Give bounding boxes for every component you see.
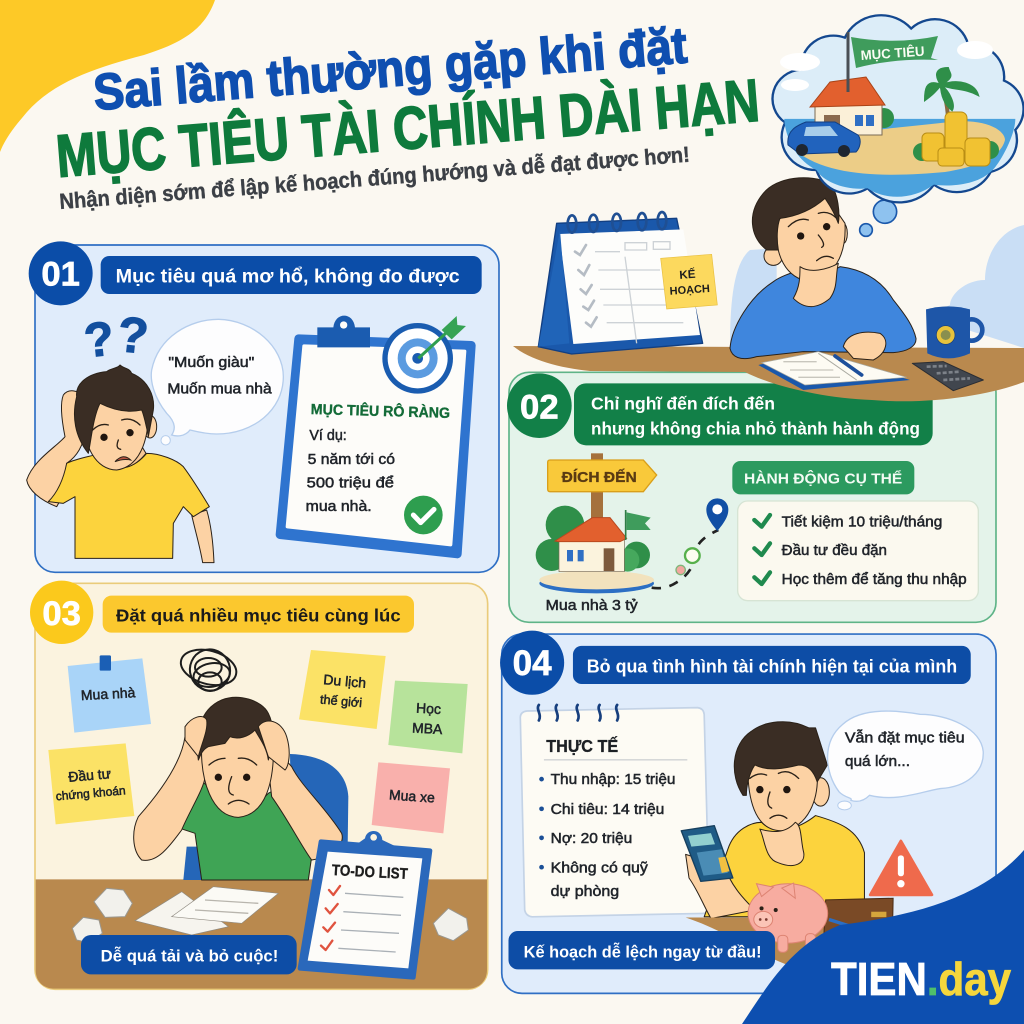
clipboard clear goal: 500 triệu để [307, 475, 394, 491]
reality note card: Thu nhập: 15 triệu [551, 772, 676, 788]
sea [784, 119, 1015, 197]
palm tree [925, 68, 978, 122]
heading 4: Bỏ qua tình hình tài chính hiện tại của mình [587, 657, 957, 677]
sticky: Học MBA: Học [416, 700, 441, 717]
worried man with calculator [681, 722, 864, 918]
heading 2 [574, 383, 933, 445]
sticky KẾ HOẠCH: KẾ [679, 268, 696, 282]
reality note card: Nợ: 20 triệu [551, 831, 632, 847]
small thought circles [860, 200, 897, 236]
sticky KẾ HOẠCH: HOẠCH [669, 283, 710, 298]
light blue cloud right [944, 225, 1024, 348]
desk top [513, 346, 1024, 401]
sticky: Học MBA [388, 681, 468, 753]
clip [317, 316, 370, 347]
stress scribble [177, 644, 240, 696]
panel 4 [500, 631, 996, 993]
calendar [538, 212, 717, 354]
badge 01 [29, 241, 93, 305]
speech bubble: Muốn mua nhà [167, 381, 272, 397]
open notebook with pen [758, 332, 910, 390]
sand island [795, 121, 1005, 175]
warning triangle [870, 841, 932, 895]
title [54, 16, 762, 214]
car [788, 122, 860, 157]
sticky: Mua nhà [68, 655, 151, 733]
blue cloud behind man [730, 248, 777, 347]
logo corner [742, 850, 1024, 1024]
wood desk [36, 879, 487, 989]
callout overload [81, 935, 297, 974]
question marks [82, 306, 151, 368]
reality note card: Không có quỹ [551, 860, 648, 876]
target icon [382, 316, 466, 394]
piggy bank [748, 883, 828, 952]
confused man in yellow shirt [27, 365, 214, 563]
speech bubble [151, 319, 283, 445]
crumpled paper balls [72, 888, 468, 943]
sticky: Đầu tư chứng khoán [48, 743, 134, 824]
clipboard clear goal: mua nhà. [306, 499, 372, 515]
callout plan: Kế hoạch dễ lệch ngay từ đầu! [524, 942, 762, 961]
goal flag: MỤC TIÊU [860, 44, 925, 63]
heading 1: Mục tiêu quá mơ hổ, không đo được [116, 265, 460, 287]
heading 4 [573, 646, 971, 684]
wooden desk strip [686, 917, 934, 964]
check badge [404, 496, 443, 534]
badge 02: 02 [520, 388, 559, 426]
sticky: Du lịch thế giới: thế giới [319, 693, 363, 710]
badge 03: 03 [42, 595, 81, 633]
yellow corner blob [0, 0, 215, 152]
action checklist: Đầu tư đều đặn [782, 543, 887, 559]
sticky: Đầu tư chứng khoán: chứng khoán [55, 783, 126, 803]
thought bubble: Vẫn đặt mục tiêu [845, 729, 965, 746]
reality note card: THỰC TẾ [546, 735, 618, 756]
sticky: Đầu tư chứng khoán: Đầu tư [68, 765, 112, 785]
badge 04: 04 [513, 644, 552, 683]
speech bubble: "Muốn giàu" [168, 355, 254, 371]
sticky: Du lịch thế giới: Du lịch [323, 671, 367, 691]
to-do clipboard [300, 831, 430, 977]
title: Nhận diện sớm để lập kế hoạch đúng hướng và dễ đạt được hơn! [59, 142, 691, 214]
wallet [824, 898, 893, 942]
question marks: ? [115, 306, 151, 365]
white sky clouds [780, 41, 993, 91]
dream thought cloud [773, 15, 1024, 202]
badge 01: 01 [41, 255, 80, 293]
action checklist: Học thêm để tăng thu nhập [782, 572, 967, 588]
panel 1 [27, 241, 499, 572]
sticky: Du lịch thế giới [299, 650, 386, 729]
action label: HÀNH ĐỘNG CỤ THỂ [744, 469, 903, 487]
heading 2: Chỉ nghĩ đến đích đến [591, 393, 775, 413]
panel 3 [30, 581, 488, 989]
notebook rings [538, 705, 618, 720]
heading 1 [101, 256, 482, 294]
desk calculator [912, 362, 983, 391]
reality note card: dự phòng [551, 884, 619, 900]
papers on desk [135, 887, 278, 935]
destination label: Mua nhà 3 tỷ [546, 598, 638, 614]
question marks: ? [82, 311, 117, 368]
destination house island [536, 453, 657, 593]
map pin icon [706, 498, 728, 531]
action checklist [738, 501, 978, 601]
reality note card: Chi tiêu: 14 triệu [551, 802, 664, 818]
action label [732, 461, 914, 494]
coffee mug [926, 306, 982, 358]
sticky: Mua xe: Mua xe [389, 786, 436, 806]
reality note card [520, 705, 709, 917]
clipboard clear goal: Ví dụ: [309, 428, 347, 444]
sticky: Mua xe [372, 762, 450, 833]
scene top: calendar and thinking man [538, 178, 983, 391]
badge 04 [500, 631, 564, 695]
heading 3 [103, 596, 414, 633]
heading 2: nhưng không chia nhỏ thành hành động [591, 418, 920, 438]
panel 2 [507, 372, 996, 622]
thinking man in blue sweater [730, 178, 916, 359]
sticky KẾ HOẠCH [661, 254, 717, 309]
callout overload: Dễ quá tải và bỏ cuộc! [101, 947, 278, 966]
thought bubble [828, 711, 983, 810]
badge 03 [30, 581, 93, 644]
coin stacks [922, 112, 990, 166]
clipboard clear goal [280, 316, 471, 554]
heading 3: Đặt quá nhiều mục tiêu cùng lúc [116, 606, 401, 626]
to-do clipboard: TO-DO LIST [331, 862, 409, 883]
goal flag [848, 32, 938, 92]
thought bubble: quá lớn... [845, 754, 910, 770]
clipboard clear goal: 5 năm tới có [308, 452, 395, 468]
title: MỤC TIÊU TÀI CHÍNH DÀI HẠN [54, 67, 762, 190]
destination sign: ĐÍCH ĐẾN [562, 469, 637, 486]
beach shrubs [874, 108, 999, 161]
callout plan [508, 931, 775, 969]
badge 02 [507, 373, 572, 438]
calculator [681, 826, 733, 881]
clipboard clear goal: MỤC TIÊU RÔ RÀNG [311, 400, 450, 422]
logo text: TIEN.day [831, 953, 1011, 1005]
house on beach [810, 77, 885, 135]
sticky: Học MBA: MBA [412, 720, 443, 737]
route to pin [652, 498, 728, 588]
stressed man in green shirt [134, 697, 348, 880]
title: Sai lầm thường gặp khi đặt [91, 16, 689, 121]
sticky: Mua nhà: Mua nhà [80, 684, 136, 703]
action checklist: Tiết kiệm 10 triệu/tháng [782, 515, 942, 531]
